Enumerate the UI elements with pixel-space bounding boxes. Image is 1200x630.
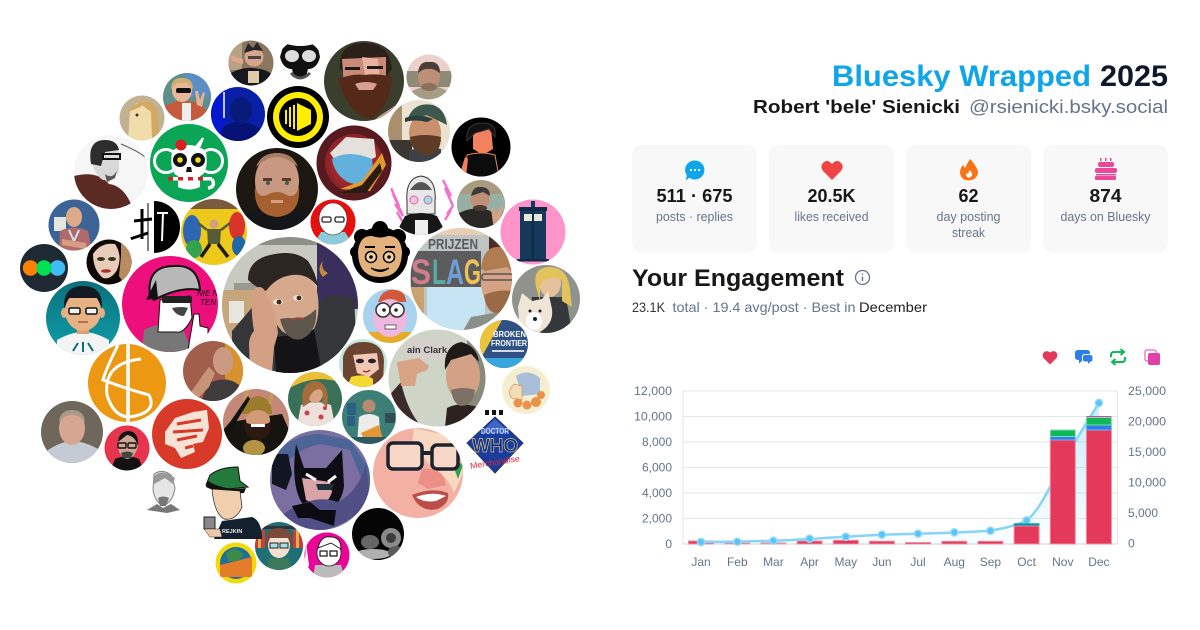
avatar: illustrated Batman [270,430,370,530]
avatar: man in front of slag sign [410,228,515,331]
avatar: Doctor Who merchandise logo: Merchandise [469,453,521,471]
engagement summary line: total · 19.4 avg/post · Best in [672,299,856,315]
grid [683,391,1118,544]
avatar: yellow and black podcast logo [267,86,329,148]
avatar: bald man with glasses on red [104,425,150,471]
avatar: comic man in maroon jacket [74,135,148,209]
month labels: Dec [1088,555,1110,569]
title: Bluesky Wrapped [832,60,1091,93]
right axis labels [1128,384,1166,550]
user name and handle [753,97,1168,117]
avatar bubble cluster [20,40,580,584]
stat card: posts and replies: posts · replies [656,210,733,224]
line points [697,399,1102,546]
avatar: large portrait of man resting head on hand [222,237,358,373]
avatar: broken frontier logo: BROKEN [493,330,526,339]
avatar: black and white engraved figures [352,508,404,560]
month labels: Sep [980,555,1001,569]
left axis labels: 12,000 [634,384,672,398]
avatar: pink background comic man: NIE NO [197,289,225,298]
avatar: cream illustrated logo [502,366,550,414]
month labels: Oct [1017,555,1037,569]
avatar: man making peace sign [457,180,505,228]
month labels: Nov [1052,555,1073,569]
legend icon: replies [1075,350,1092,364]
stat card: posts and replies [632,145,757,253]
avatar: white haired cartoon on red [310,199,356,245]
user name and handle: Robert 'bele' Sienicki [753,97,960,117]
icon: birthday cake [1095,158,1117,180]
month labels: Jan [691,555,711,569]
stat card: days on Bluesky: days on Bluesky [1060,210,1151,224]
engagement summary line [632,299,927,315]
avatar: man against pale sky [406,54,452,100]
avatar: blue tinted portrait [211,87,265,141]
legend icon: likes [1043,351,1057,364]
month labels: Apr [800,555,819,569]
avatar: curly haired cartoon with glasses [350,221,410,283]
legend icon: quotes [1145,350,1160,365]
engagement summary line: 23.1K [632,299,666,315]
avatar: green skull logo [150,124,228,202]
avatar: yellow circular tree badge [215,542,257,584]
avatar: orange dollar logo [87,343,167,423]
left axis labels: 10,000 [634,410,672,424]
avatar: pink cartoon creature with cap [363,289,417,343]
icon: flame [960,159,978,180]
cumulative line [701,403,1099,542]
right axis labels: 5,000 [1128,506,1158,520]
avatar: man in front of slag sign: S [411,253,431,292]
engagement chart [634,384,1166,569]
engagement summary line: December [859,299,927,315]
avatar: blue police box on pink [500,199,566,265]
stat card: posting streak: day posting [936,210,1001,224]
stat card: posts and replies: 511 · 675 [656,186,732,206]
stat card: posting streak: 62 [958,186,978,206]
engagement heading: Your Engagement [632,265,844,292]
stat card: likes received [769,145,894,253]
avatar: red tiger logo [152,399,222,469]
avatar: older man in white shirt [40,400,104,464]
avatar: brunette cartoon woman [339,339,387,387]
avatar: Doctor Who merchandise logo [467,410,523,473]
avatar: broken frontier logo: FRONTIER [491,339,527,348]
avatar: three dots logo [20,244,68,292]
avatar: man in front of slag sign: PRIJZEN [428,236,478,253]
avatar: man holding name card: ain Clark [407,345,448,356]
left axis labels: 6,000 [642,460,672,474]
icon: speech bubble [685,160,704,180]
avatar: pink scribble manga girl [390,176,454,235]
stat card: days on Bluesky: 874 [1090,186,1122,206]
icon: heart [821,161,843,180]
avatar: cartoon man on teal [46,281,120,355]
user name and handle: @rsienicki.bsky.social [969,97,1168,117]
right axis labels: 15,000 [1128,445,1166,459]
avatar: man in front of slag sign: A [446,253,464,292]
left axis labels [634,384,672,551]
stat card: likes received: likes received [794,210,869,224]
avatar: man in front of slag sign: G [464,253,481,292]
month labels: Jul [910,555,926,569]
month labels: Aug [944,555,965,569]
chart legend icons [1043,349,1160,365]
right axis labels: 20,000 [1128,414,1166,428]
left axis labels: 2,000 [642,512,672,526]
avatar: man in green hat holding a drink [204,467,262,539]
icon: info [856,270,870,284]
avatar: broken frontier logo [480,320,528,368]
avatar: blond comic character [119,95,165,141]
avatar: bald man gesturing [183,341,243,401]
avatar: Doctor Who merchandise logo: DOCTOR [481,427,509,436]
small monthly bars [688,540,1003,544]
month labels [691,555,1110,569]
left axis labels: 8,000 [642,435,672,449]
bar: October [1014,524,1039,544]
avatar: black cartoon character [451,117,511,177]
avatar: person with hand gesture [228,40,274,86]
stat card: likes received: 20.5K [808,186,856,206]
avatar: chef with flames [342,390,396,444]
month labels: Mar [763,555,784,569]
stat card: posting streak: streak [952,226,986,240]
avatar: pink background comic man [122,256,225,352]
right axis labels: 25,000 [1128,384,1166,398]
month labels: Jun [872,555,892,569]
right axis labels: 10,000 [1128,476,1166,490]
avatar: woman in floral dress [288,372,342,426]
legend icon: reposts [1111,349,1125,365]
avatar: bearded illustrated man [324,41,404,121]
avatar: woman with red lips [86,239,132,285]
month labels: Feb [727,555,748,569]
avatar: man in green cap [388,100,450,162]
avatar: pink background comic man: TEN [200,298,216,307]
bar: November [1050,430,1075,544]
stat card: posting streak [906,145,1031,253]
avatar: man posing with candy characters [181,199,247,265]
stat card: days on Bluesky [1043,145,1168,253]
left axis labels: 0 [665,537,672,551]
avatar: blonde woman with dog [512,265,580,333]
avatar: man in front of slag sign: L [432,253,446,292]
avatar: goggle mask [280,44,320,80]
month labels: May [834,555,857,569]
avatar: reader in front of bookshelves [255,522,303,570]
avatar: man in green hat holding a drink: REJKIN [222,529,242,535]
cumulative area fill [701,403,1099,544]
avatar: glasses cartoon on magenta [304,532,350,578]
right axis labels: 0 [1128,536,1135,550]
avatar: viking warrior [223,389,289,456]
title: 2025 [1100,60,1168,93]
avatar: big caricature with glasses [373,428,463,518]
avatar: Doctor Who merchandise logo: WHO [472,436,518,457]
left axis labels: 4,000 [642,486,672,500]
avatar: person with sunglasses and peace sign [163,73,211,121]
avatar: character with blue medical mask [316,125,392,201]
avatar: man holding name card [387,329,487,427]
avatar: HI calligraphy logo [130,201,180,253]
avatar: grey sketch portrait [147,471,180,513]
avatar: bald bearded man portrait [236,148,318,230]
bar: December [1086,416,1111,544]
avatar: bald man with lanyard [48,199,100,251]
